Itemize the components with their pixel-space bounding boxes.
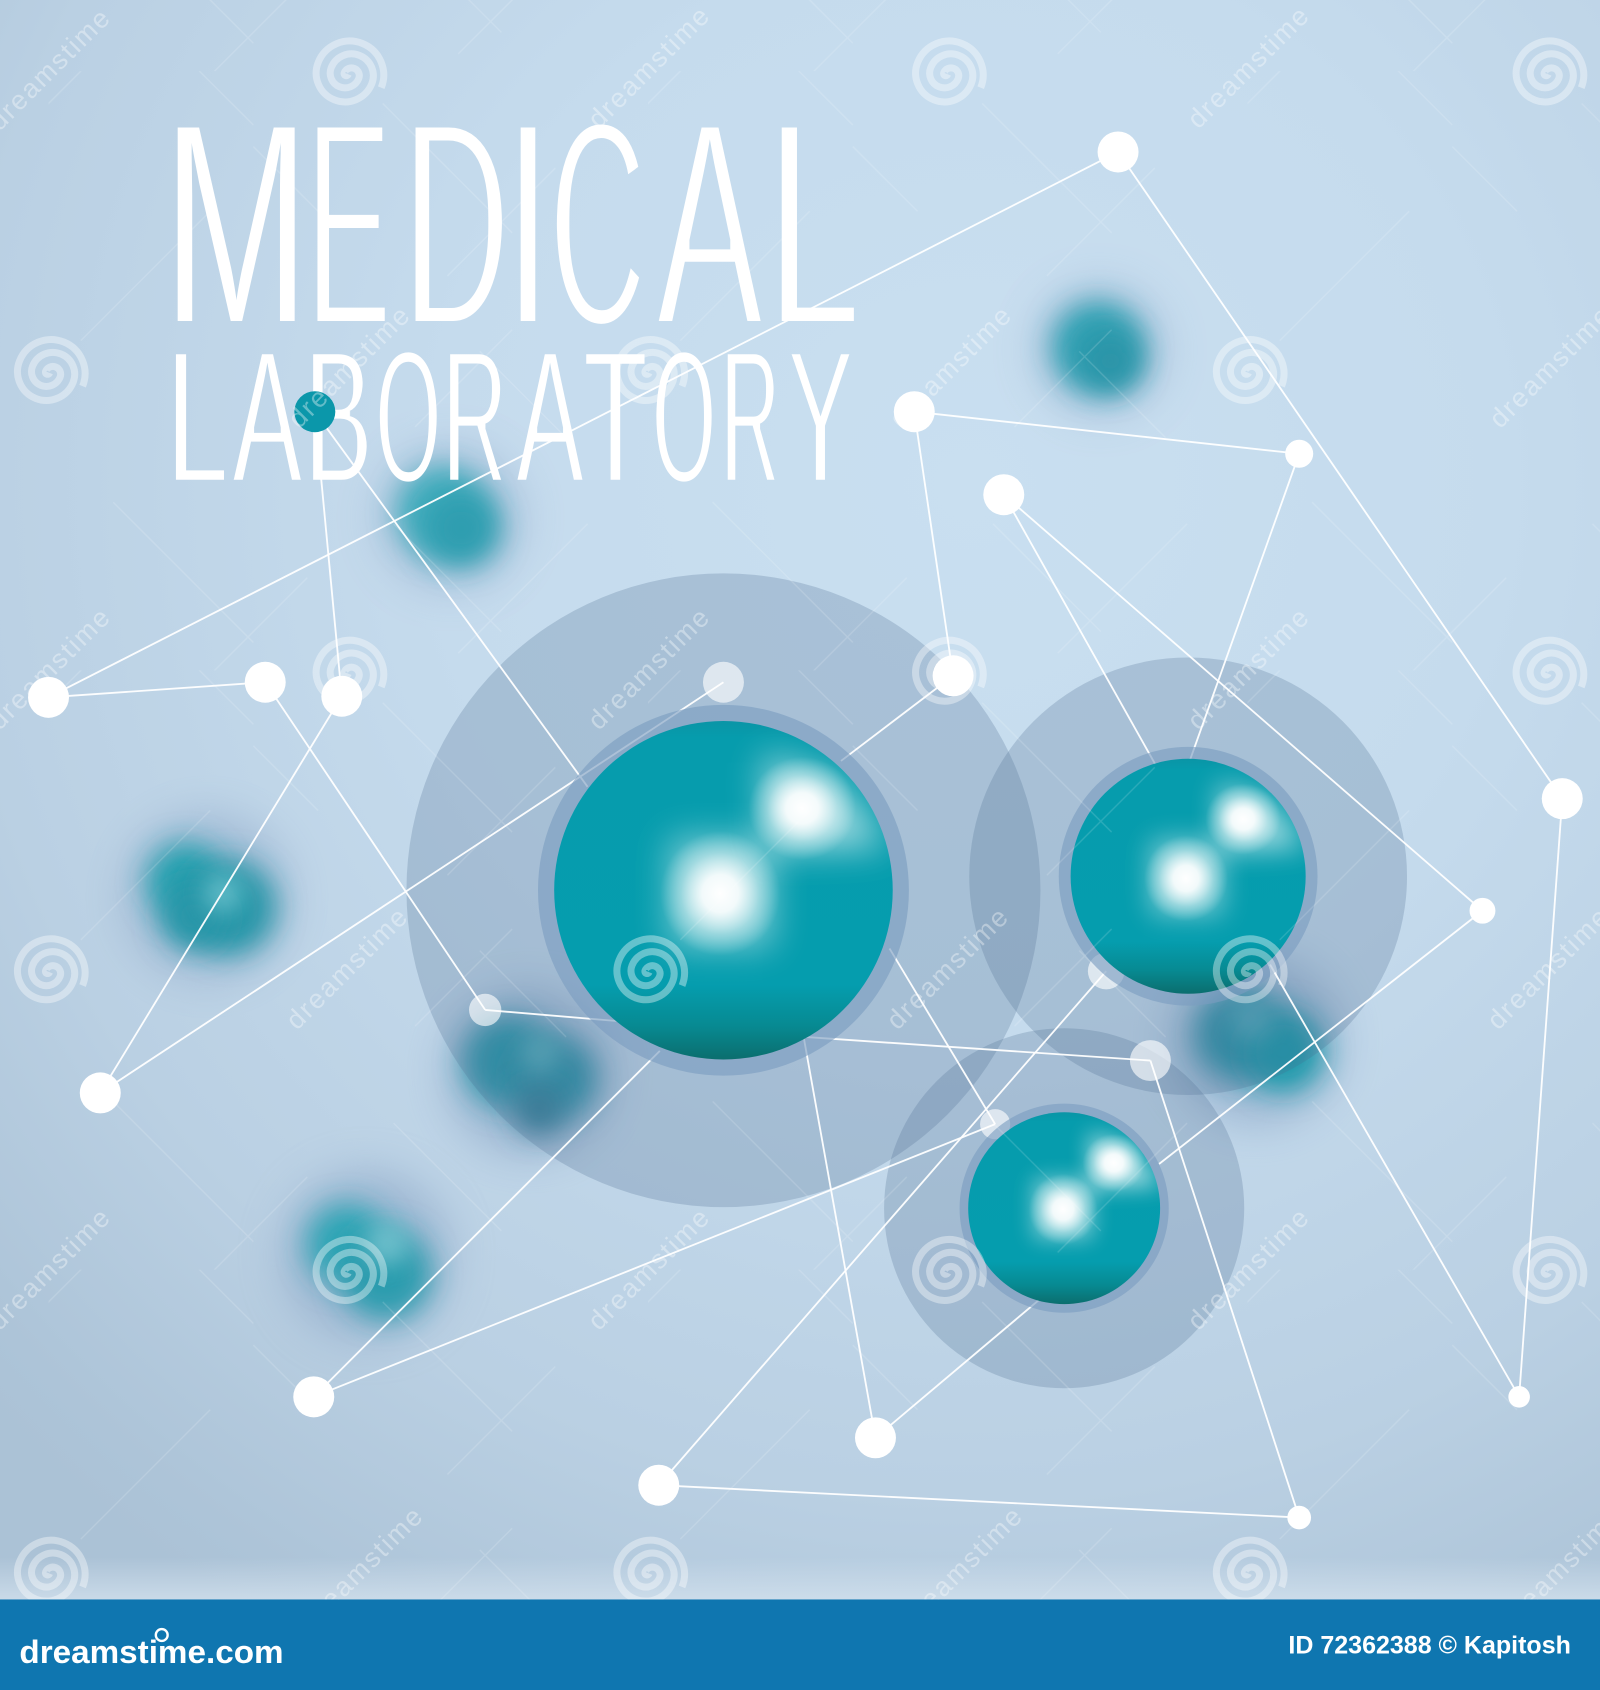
stock watermark: dreamstime [881, 901, 1015, 1035]
title line: MEDICAL: L [768, 61, 859, 388]
sphere: right cell [1059, 747, 1318, 1006]
stock watermark: dreamstime [1181, 1201, 1316, 1336]
blurred cell: centre right [1172, 956, 1340, 1124]
halo: lower cell [884, 1028, 1244, 1388]
blurred cell: centre left [446, 991, 610, 1154]
stock watermark: dreamstime [582, 1201, 716, 1336]
title line: MEDICAL [163, 61, 859, 388]
footer bar [0, 1599, 1600, 1690]
title line: MEDICAL: A [656, 61, 764, 388]
title line: LABORATORY: T [584, 311, 647, 523]
stock watermark: dreamstime [295, 1500, 430, 1634]
title line: LABORATORY: O [653, 311, 716, 523]
stock watermark: dreamstime [582, 601, 716, 736]
title line: LABORATORY: O [376, 311, 441, 523]
blurred cell: under title [380, 446, 522, 588]
halo: large cell [406, 573, 1040, 1207]
footer logo: dreamstime.com [19, 1634, 284, 1670]
title line: LABORATORY: B [305, 311, 372, 523]
title line: LABORATORY [167, 311, 853, 523]
title line: MEDICAL: E [307, 61, 390, 388]
blurred cell: top right [1035, 286, 1164, 415]
blurred cell: left [125, 815, 289, 979]
title line: MEDICAL: D [404, 61, 509, 388]
translucent cell halos [406, 573, 1407, 1388]
stock watermark: dreamstime [282, 299, 417, 434]
title line: LABORATORY: A [516, 311, 584, 523]
title [163, 61, 859, 523]
sphere: large cell [538, 705, 909, 1076]
stock watermark: dreamstime [1181, 0, 1316, 134]
title line: LABORATORY: R [443, 311, 507, 523]
stock watermark: dreamstime [280, 901, 415, 1035]
network connection lines [49, 152, 1562, 1518]
title line: LABORATORY: A [232, 311, 302, 523]
stock watermark: dreamstime [1181, 601, 1316, 736]
footer credit: ID 72362388 © Kapitosh [1288, 1632, 1571, 1659]
blurred background cells [125, 286, 1340, 1340]
title line: MEDICAL: I [506, 61, 550, 388]
stock watermark: dreamstime [582, 0, 716, 134]
halo: right cell [969, 657, 1407, 1095]
title line: MEDICAL: M [163, 61, 309, 388]
stock watermark: dreamstime [884, 299, 1018, 434]
stock watermark: dreamstime [895, 1500, 1029, 1634]
title line: MEDICAL: C [550, 61, 646, 388]
title line: LABORATORY: Y [788, 311, 853, 523]
sphere: lower cell [960, 1104, 1169, 1313]
teal network node [294, 391, 335, 432]
blurred cell: bottom left [282, 1172, 451, 1340]
title line: LABORATORY: L [167, 311, 228, 523]
title line: LABORATORY: R [721, 311, 780, 523]
